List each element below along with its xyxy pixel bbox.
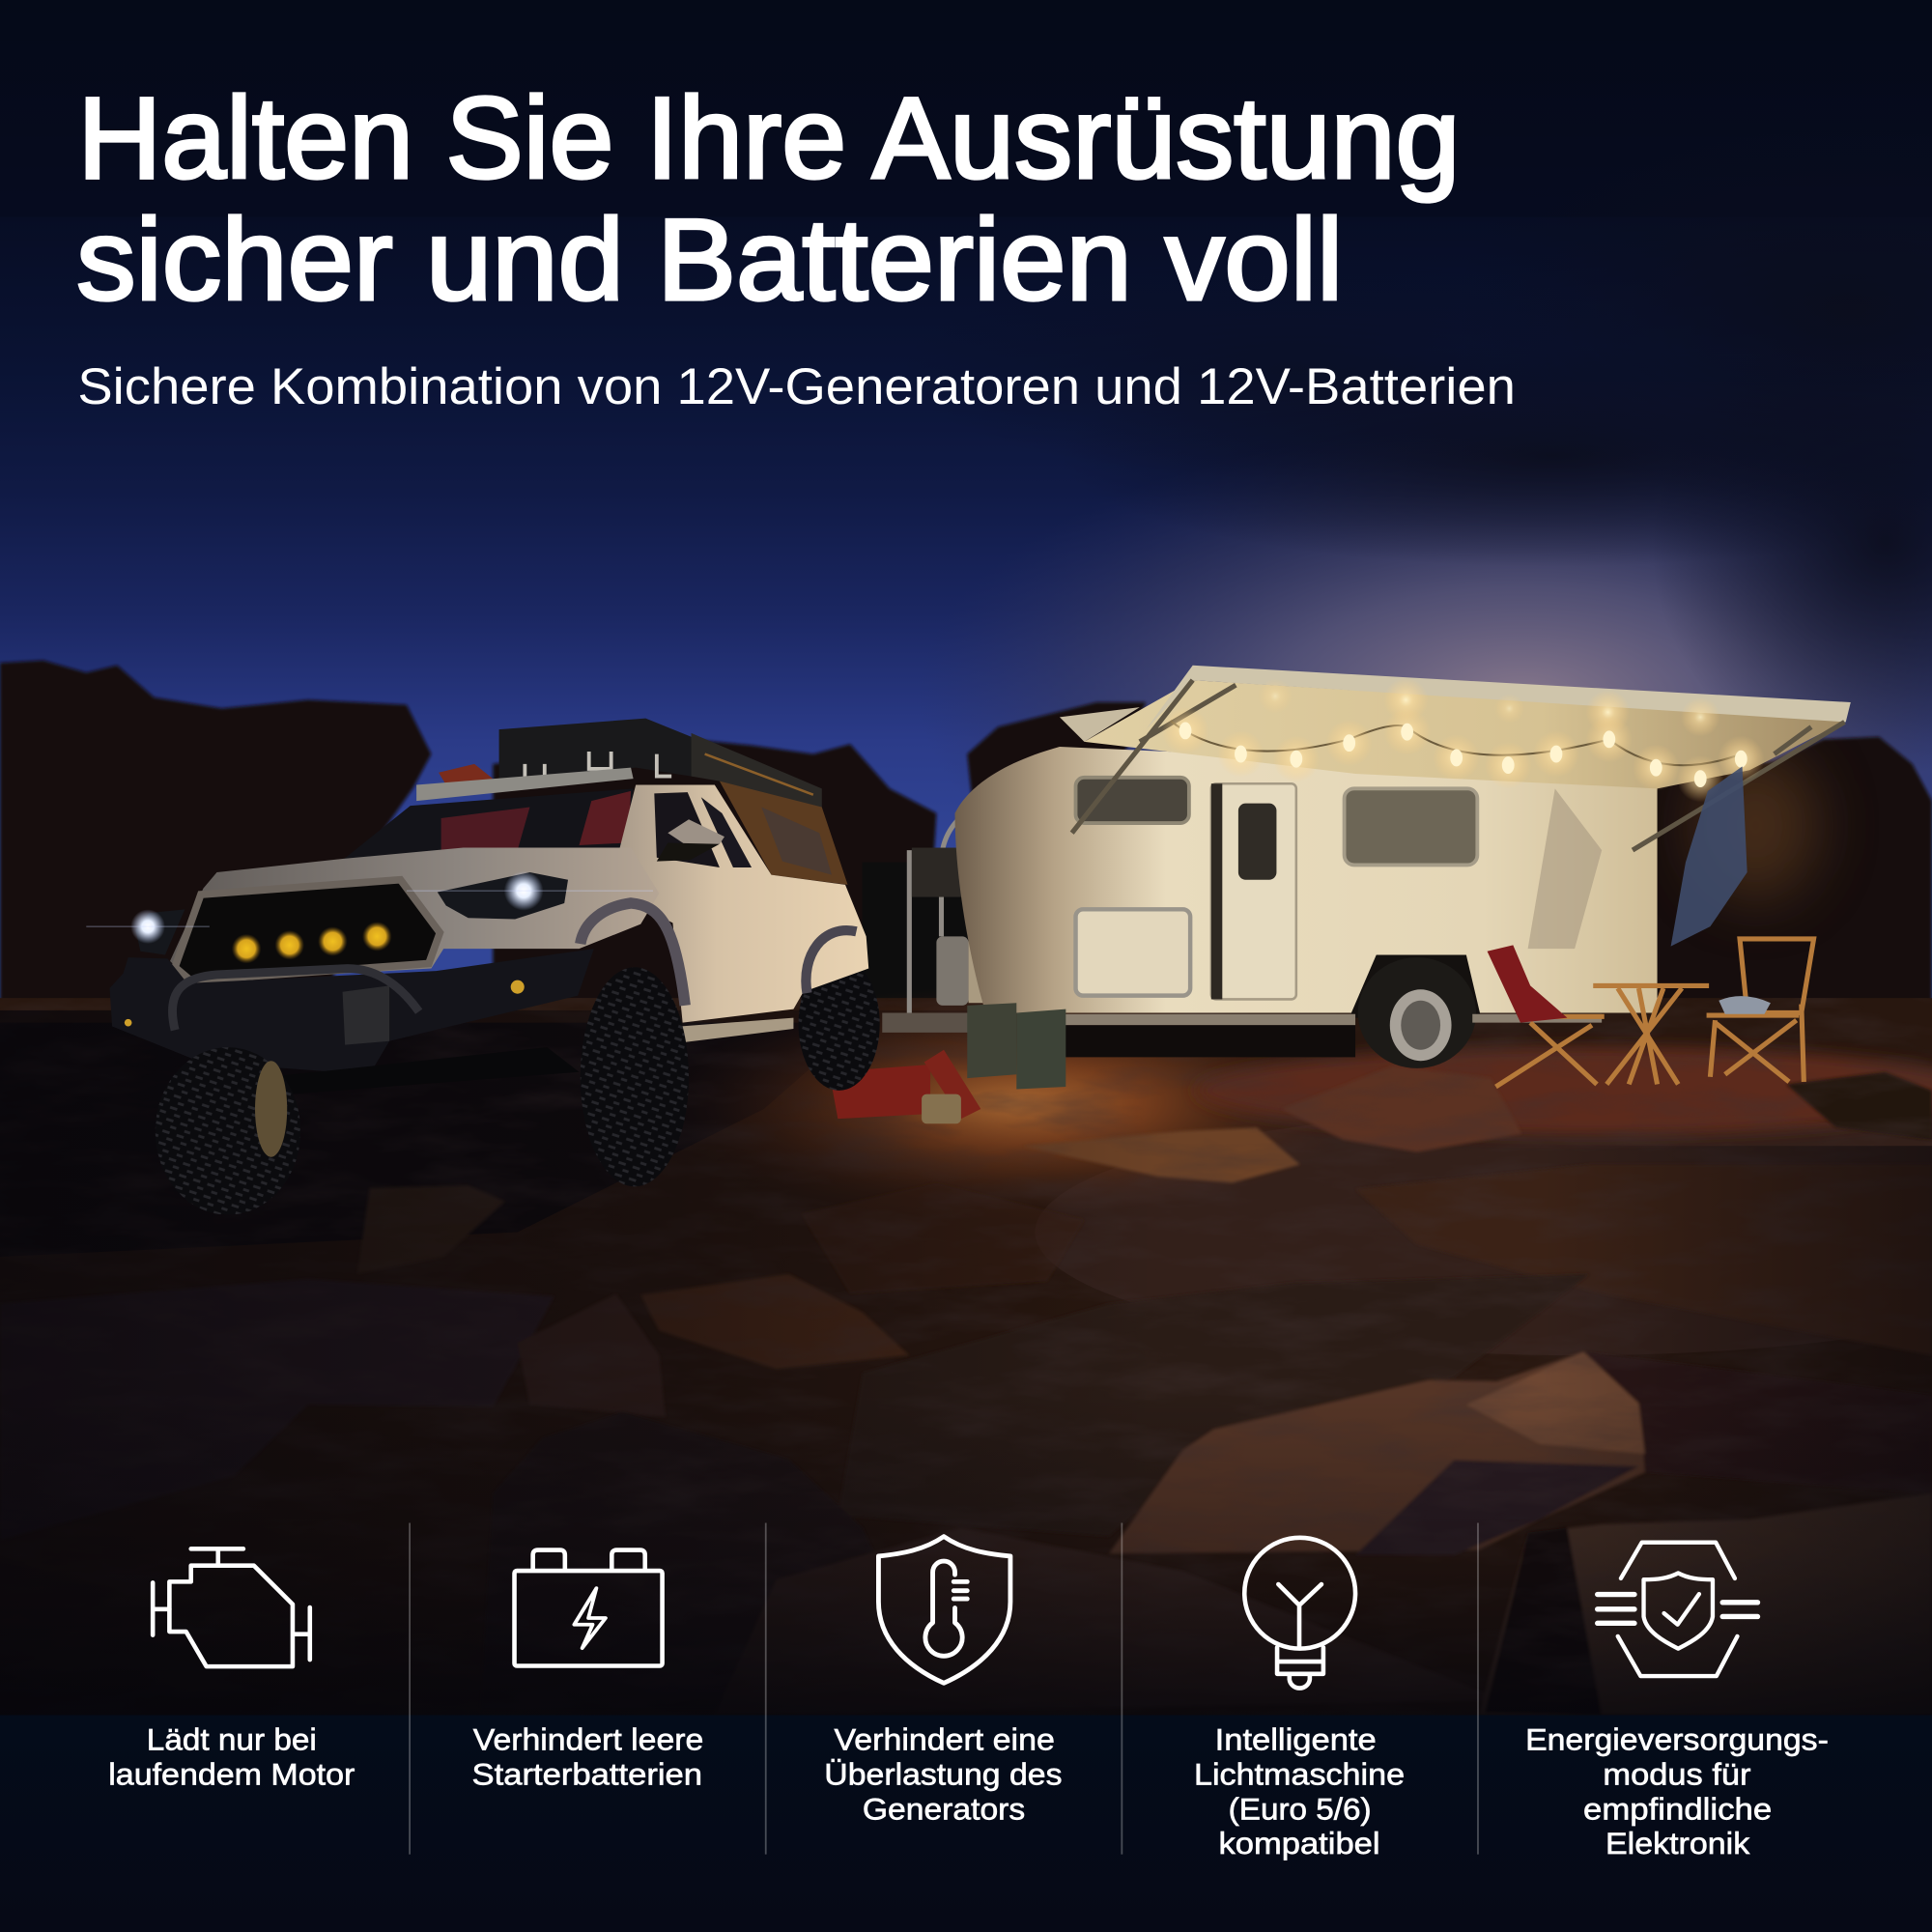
label: Energieversorgungsmodus für empfindliche Elektronik	[1525, 1723, 1829, 1861]
label: Verhindert eine Überlastung des Generators	[824, 1723, 1062, 1826]
windows and door	[1076, 778, 1602, 999]
icon: battery	[515, 1550, 663, 1665]
windshield	[343, 788, 634, 860]
mid rocks	[0, 1065, 1932, 1540]
background: rock silhouettes	[0, 661, 1932, 1035]
side windows and mirror	[654, 792, 752, 867]
red chair	[1488, 945, 1605, 1087]
rear rack and tanks	[882, 807, 993, 1033]
hood	[170, 848, 659, 982]
headlights	[86, 871, 653, 955]
bumper block	[343, 985, 389, 1045]
icon: engine	[153, 1548, 310, 1666]
grille	[175, 880, 440, 980]
ground and rocks	[0, 985, 1932, 1932]
label: Energieversorgungsmodus für empfindliche Elektronik: Energieversorgungs-	[1525, 1723, 1829, 1757]
roof bar	[416, 768, 634, 801]
folding table	[1593, 985, 1709, 1084]
fog lights	[125, 980, 525, 1026]
label: Lädt nur bei laufendem Motor: Lädt nur bei	[147, 1723, 317, 1757]
label: Energieversorgungsmodus für empfindliche Elektronik: empfindliche	[1583, 1792, 1772, 1826]
wooden chair	[1707, 939, 1814, 1082]
label: Verhindert leere Starterbatterien: Starterbatterien	[472, 1758, 702, 1792]
caravan body	[955, 747, 1658, 1012]
wheel arch and wheel	[1350, 955, 1481, 1068]
skirt	[1062, 1014, 1602, 1025]
label: Energieversorgungsmodus für empfindliche Elektronik: modus für	[1603, 1758, 1750, 1792]
bumper	[110, 949, 594, 1074]
pickup truck	[86, 719, 880, 1215]
rear tire	[799, 957, 880, 1091]
icon: shield with thermometer	[878, 1537, 1010, 1683]
chassis	[259, 1047, 579, 1096]
camp furniture	[1488, 939, 1814, 1087]
label: Intelligente Lichtmaschine (Euro 5/6) kompatibel: Lichtmaschine	[1194, 1758, 1405, 1792]
curtain	[1671, 766, 1747, 947]
label: Intelligente Lichtmaschine (Euro 5/6) kompatibel: Intelligente	[1215, 1723, 1377, 1757]
label: Verhindert leere Starterbatterien: Verhindert leere	[473, 1723, 703, 1757]
jerry cans and crates	[829, 1003, 1065, 1123]
front left tire	[156, 1047, 300, 1215]
string lights	[1162, 678, 1765, 802]
bull bar	[172, 969, 419, 1030]
label: Lädt nur bei laufendem Motor: laufendem Motor	[108, 1758, 355, 1792]
title	[76, 73, 1460, 325]
label: Verhindert eine Überlastung des Generators: Verhindert eine	[835, 1723, 1055, 1757]
roof boxes	[439, 719, 822, 813]
label: Intelligente Lichtmaschine (Euro 5/6) kompatibel: (Euro 5/6)	[1229, 1792, 1372, 1826]
warm light behind curtain	[1694, 752, 1817, 899]
subtitle: Sichere Kombination von 12V-Generatoren und 12V-Batterien	[77, 358, 1516, 415]
label: Verhindert eine Überlastung des Generators: Generators	[863, 1792, 1025, 1826]
canopy and body	[720, 781, 848, 885]
label: Verhindert leere Starterbatterien	[472, 1723, 703, 1792]
label: Verhindert eine Überlastung des Generators: Überlastung des	[824, 1758, 1062, 1792]
icon: protected power hexagon	[1598, 1543, 1758, 1676]
label: Intelligente Lichtmaschine (Euro 5/6) kompatibel: kompatibel	[1218, 1827, 1380, 1861]
fenders	[581, 903, 685, 1006]
awning	[1060, 666, 1851, 850]
foreground rocks	[480, 1274, 1932, 1716]
label: Intelligente Lichtmaschine (Euro 5/6) kompatibel	[1194, 1723, 1405, 1861]
label: Lädt nur bei laufendem Motor	[108, 1723, 355, 1792]
front right tire	[581, 967, 689, 1186]
caravan with awning	[882, 666, 1851, 1068]
title: Halten Sie Ihre Ausrüstung	[77, 73, 1460, 203]
background: night sky	[0, 0, 1932, 1109]
title: sicher und Batterien voll	[76, 195, 1343, 325]
bottom information band	[0, 1716, 1932, 1932]
column dividers	[410, 1523, 1478, 1855]
icon: light bulb	[1244, 1538, 1355, 1689]
label: Energieversorgungsmodus für empfindliche Elektronik: Elektronik	[1605, 1827, 1750, 1861]
